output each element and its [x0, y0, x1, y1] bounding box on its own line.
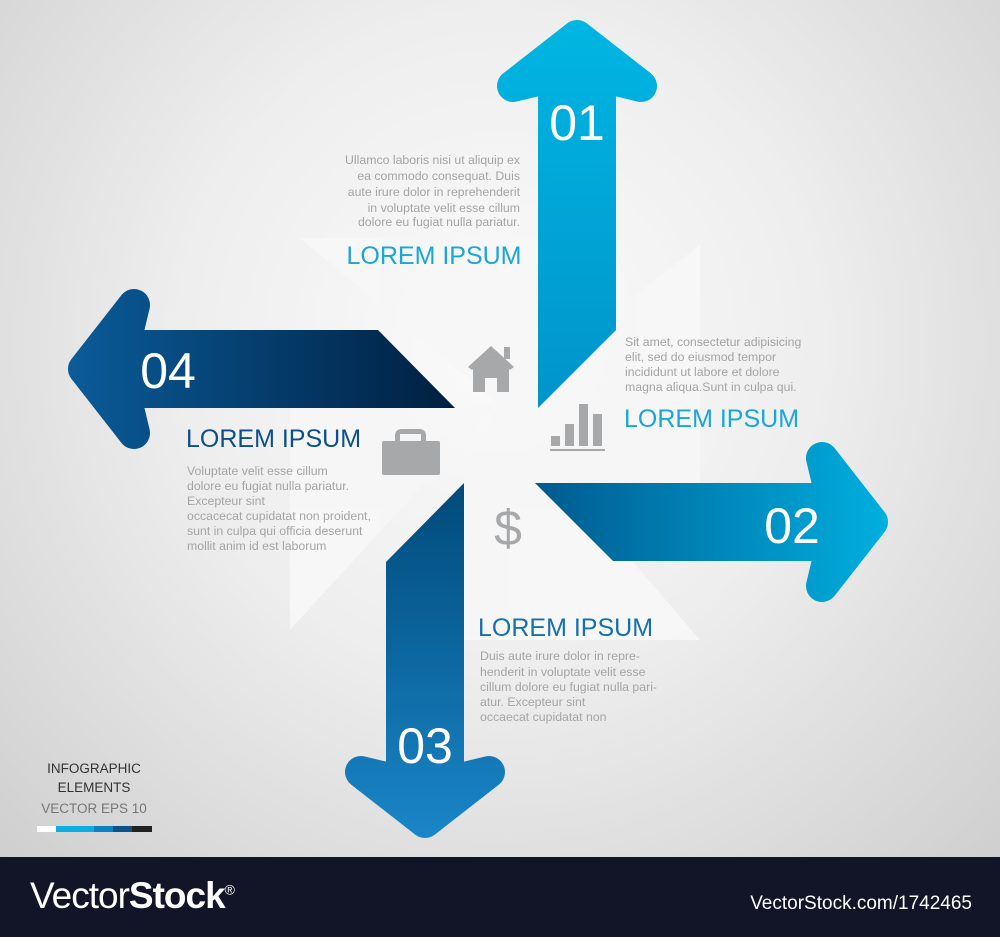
text 02: Sit amet, consectetur adipisicing	[625, 335, 802, 349]
text 02: elit, sed do eiusmod tempor	[625, 350, 776, 364]
text 04: occacecat cupidatat non proident,	[187, 509, 371, 523]
text 02	[625, 335, 802, 394]
text 03: henderit in voluptate velit esse	[480, 665, 646, 679]
text 02: magna aliqua.Sunt in culpa qui.	[625, 380, 797, 394]
arrow 03	[361, 483, 489, 822]
heading 01: LOREM IPSUM	[346, 242, 522, 270]
label: infographic elements: INFOGRAPHIC	[47, 761, 141, 776]
text 01: aute irure dolor in reprehenderit	[348, 185, 521, 199]
footer bar	[0, 857, 1000, 937]
text 04: mollit anim id est laborum	[187, 539, 326, 553]
text 01: dolore eu fugiat nulla pariatur.	[358, 215, 520, 229]
text 03: atur. Excepteur sint	[480, 695, 586, 709]
number 03: 03	[397, 718, 453, 774]
icon: house	[468, 346, 514, 392]
text 04: Excepteur sint	[187, 494, 266, 508]
arrow 02	[535, 458, 872, 586]
text 03: Duis aute irure dolor in repre-	[480, 649, 640, 663]
heading 02: LOREM IPSUM	[624, 405, 799, 433]
icon: briefcase	[382, 429, 440, 475]
text 04: Voluptate velit esse cillum	[187, 464, 328, 478]
heading 03: LOREM IPSUM	[478, 614, 653, 642]
text 01: in voluptate velit esse cillum	[368, 201, 520, 215]
label: infographic elements: VECTOR EPS 10	[41, 801, 147, 816]
text 01: Ullamco laboris nisi ut aliquip ex	[345, 153, 521, 167]
text 02: incididunt ut labore et dolore	[625, 365, 780, 379]
text 03: occaecat cupidatat non	[480, 710, 607, 724]
text 04	[187, 464, 371, 553]
url: VectorStock.com/1742465	[750, 893, 972, 914]
number 01: 01	[549, 95, 605, 151]
color bar	[37, 826, 152, 832]
text 01: ea commodo consequat. Duis	[357, 169, 520, 183]
label: infographic elements: ELEMENTS	[58, 780, 130, 795]
arrow 04	[84, 305, 455, 433]
arrow 01	[513, 36, 641, 408]
text 01	[345, 153, 521, 229]
icon: dollar: $	[494, 500, 522, 556]
icon: bar chart	[550, 404, 605, 451]
label: infographic elements	[41, 761, 147, 816]
text 04: sunt in culpa qui officia deserunt	[187, 524, 363, 538]
text 03: cillum dolore eu fugiat nulla pari-	[480, 680, 657, 694]
number 02: 02	[764, 498, 820, 554]
text 04: dolore eu fugiat nulla pariatur.	[187, 479, 349, 493]
number 04: 04	[140, 343, 196, 399]
petals background	[290, 238, 700, 640]
heading 04: LOREM IPSUM	[186, 425, 361, 453]
logo: VectorStock®	[30, 875, 234, 916]
text 03	[480, 649, 657, 724]
